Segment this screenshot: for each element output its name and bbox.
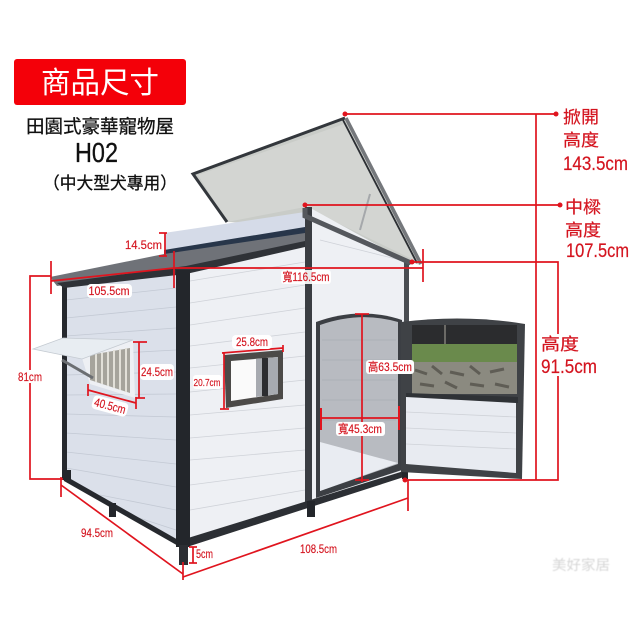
dimension: opened height: 高度 — [563, 131, 599, 150]
dimension: overall height: 91.5cm — [541, 357, 597, 378]
dimension: ridge height: 高度 — [565, 221, 601, 240]
dimension: base width 108.5: 108.5cm — [300, 542, 337, 556]
dimension: vent 40.5 — [88, 384, 136, 417]
dimension: opened height: 143.5cm — [563, 154, 628, 175]
dimension: wall height 81 — [18, 276, 63, 479]
dimension: vent 40.5: 40.5cm — [93, 395, 127, 417]
dimension: vent 24.5: 24.5cm — [141, 365, 173, 379]
size note: （中大型犬專用） — [43, 174, 177, 193]
dimension: ridge height: 107.5cm — [566, 241, 629, 262]
dimension: window 25.8 — [222, 335, 283, 353]
dog house — [33, 118, 525, 565]
dimension: ridge height — [302, 198, 629, 262]
left side wall — [62, 270, 180, 547]
corner post — [176, 270, 190, 565]
dimension: window 20.7 — [193, 353, 229, 409]
open roof lid — [193, 118, 421, 265]
house feet — [62, 470, 408, 517]
dimension: overall height — [402, 114, 597, 482]
red title badge: 商品尺寸 — [41, 67, 159, 100]
open door panel — [401, 318, 525, 479]
dimension: door height — [355, 314, 414, 482]
watermark: 美好家居 — [552, 557, 610, 573]
red title badge — [14, 59, 186, 105]
doorway — [316, 313, 402, 498]
dimension: depth 105.5: 105.5cm — [88, 284, 130, 298]
dimension: foot height — [189, 547, 213, 563]
front wall — [188, 205, 409, 546]
product name: 田園式豪華寵物屋 — [26, 116, 174, 137]
small side window — [224, 350, 283, 408]
dimension: opened height — [342, 108, 628, 175]
model number: H02 — [75, 137, 118, 168]
dimension: ridge height: 中樑 — [565, 198, 601, 217]
dimension: door height: 高63.5cm — [368, 359, 412, 374]
closed roof panel — [50, 208, 411, 288]
dimension: width 116.5: 寬116.5cm — [282, 269, 330, 284]
vent opening and awning — [33, 338, 135, 398]
dimension: 14.5 roof — [125, 233, 167, 256]
dimension: opened height: 掀開 — [563, 108, 599, 127]
dimension: base width 108.5 — [183, 480, 408, 580]
dimension: base depth 94.5: 94.5cm — [81, 526, 113, 540]
dimension: base depth 94.5 — [61, 477, 183, 574]
dimension: width 116.5 — [174, 249, 423, 284]
dimension: vent 24.5 — [133, 342, 174, 398]
dimension: door width: 寬45.3cm — [338, 421, 382, 436]
dimension: depth 105.5 — [51, 251, 174, 298]
dimension: wall height 81: 81cm — [18, 370, 42, 384]
dimension: door width — [321, 406, 399, 436]
dimension: window 25.8: 25.8cm — [236, 335, 268, 349]
dimension: 14.5 roof: 14.5cm — [125, 238, 162, 252]
dimension: foot height: 5cm — [196, 547, 213, 561]
dimension: window 20.7: 20.7cm — [194, 378, 220, 389]
dimension: overall height: 高度 — [541, 335, 579, 354]
